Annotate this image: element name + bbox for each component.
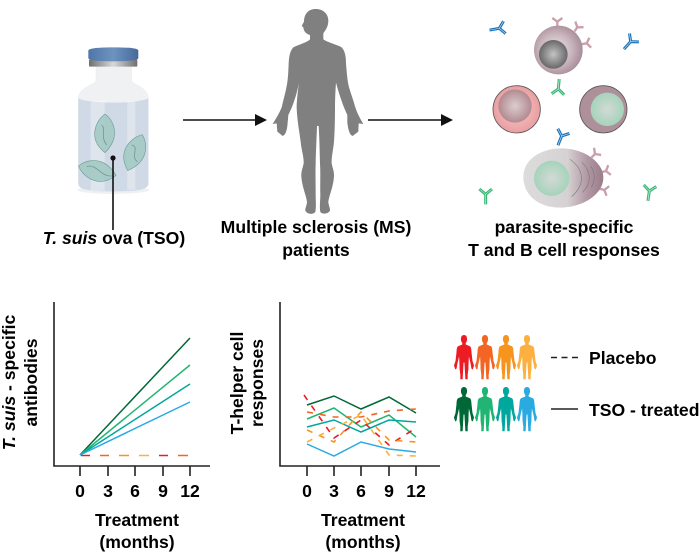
- gray crimp band: [89, 59, 137, 67]
- y-axis title: T-helper cell: [227, 332, 247, 434]
- x tick labels: 0: [75, 481, 85, 501]
- placebo key: Placebo: [589, 348, 657, 368]
- pointer line from vial: [110, 155, 116, 230]
- x tick labels: [75, 481, 200, 501]
- cell: top memory cell: [534, 18, 591, 74]
- x tick labels: 9: [384, 481, 394, 501]
- label: immune responses: T and B cell responses: [468, 240, 660, 260]
- x tick labels: 3: [103, 481, 113, 501]
- treated key: TSO - treated: [589, 400, 699, 420]
- arrow: patient to immune response: [368, 114, 453, 126]
- placebo patient icons: [454, 335, 537, 379]
- x-axis title: Treatment: [321, 510, 405, 530]
- x tick labels: 12: [180, 481, 200, 501]
- x tick labels: 12: [406, 481, 426, 501]
- chart: T. suis specific antibodies: antibodies: [21, 338, 41, 426]
- x tick labels: 9: [158, 481, 168, 501]
- treated lines: [307, 396, 416, 456]
- antibodies: [479, 21, 656, 204]
- x tick labels: 6: [130, 481, 140, 501]
- x tick labels: 3: [329, 481, 339, 501]
- cell: plasma cell: [523, 148, 611, 208]
- axes: [54, 302, 210, 476]
- chart: T. suis specific antibodies: [0, 302, 210, 552]
- human silhouette: [273, 9, 363, 214]
- placebo lines: [304, 395, 416, 456]
- x tick labels: 6: [356, 481, 366, 501]
- arrow: vial to patient: [183, 114, 267, 126]
- x-axis title: (months): [325, 532, 401, 552]
- x tick labels: 0: [302, 481, 312, 501]
- chart: T-helper cell responses: responses: [247, 339, 267, 427]
- legend: [454, 335, 699, 431]
- axes: [280, 302, 440, 476]
- label: patients: patients: [282, 240, 350, 260]
- label: T. suis ova: T. suis ova (TSO): [43, 228, 185, 248]
- chart: T-helper cell responses: [227, 302, 440, 552]
- x-axis title: Treatment: [95, 510, 179, 530]
- blue cap: [88, 47, 138, 61]
- label: immune responses: parasite-specific: [495, 217, 634, 237]
- vial illustration: [76, 47, 151, 194]
- label: patients: Multiple sclerosis (MS): [221, 217, 411, 237]
- treated patient icons: [454, 387, 537, 431]
- placebo dashes: [81, 454, 188, 456]
- T. suis eggs: [76, 114, 151, 185]
- x tick labels: [302, 481, 426, 501]
- treated lines: [80, 338, 190, 455]
- cell: pink: [493, 86, 540, 133]
- cell: mauve with green nucleus: [580, 86, 627, 133]
- placebo key: [551, 348, 657, 368]
- x-axis title: (months): [99, 532, 175, 552]
- immune cells and antibodies: [479, 18, 656, 208]
